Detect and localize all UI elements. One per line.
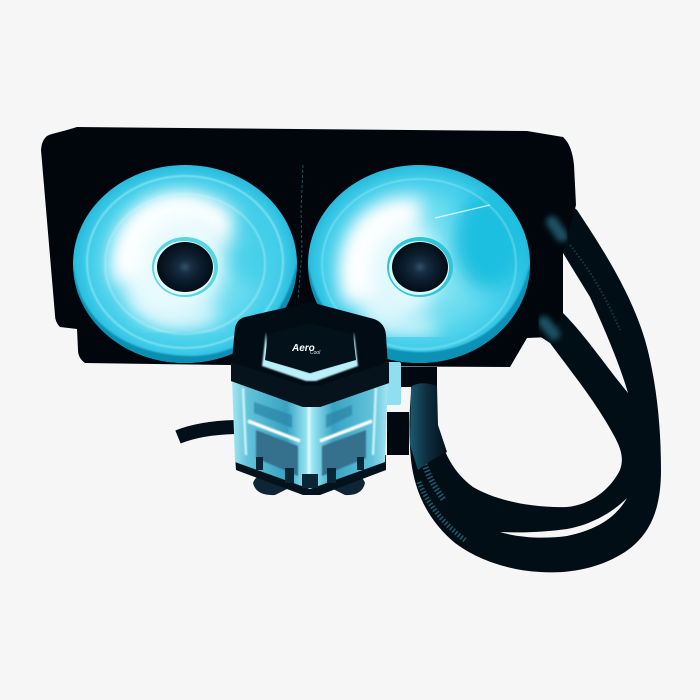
product illustration: RGB liquid cooler [41, 127, 661, 572]
hose braid highlights [419, 245, 620, 540]
pump feet [253, 475, 365, 495]
pump light bars [243, 388, 376, 482]
radiator body [41, 127, 576, 367]
pump base plate [235, 455, 386, 495]
pump [231, 302, 389, 495]
pump dark coolant [256, 430, 366, 476]
pump side fitting [386, 362, 401, 405]
pump cap lower band [231, 362, 389, 407]
pump glass right [310, 378, 388, 489]
hose connector block [387, 367, 447, 470]
hose collars on radiator [544, 222, 562, 334]
radiator centre seam [298, 165, 303, 300]
fan right [308, 165, 530, 380]
fan right bottom rim [308, 264, 530, 363]
fan left bottom rim [73, 264, 297, 363]
fan left [73, 165, 297, 380]
pump upper glass detail [254, 402, 352, 428]
hoses silhouette [409, 200, 661, 572]
logo: Cool [310, 350, 321, 356]
pump cap inner hexagon [265, 323, 356, 373]
pump hexagonal cap [231, 302, 389, 407]
pump cap light ring [262, 332, 358, 381]
fan right hub [392, 242, 448, 292]
cable [178, 427, 235, 437]
fan left hub [157, 242, 213, 292]
logo: Aero [291, 343, 315, 354]
pump notches [256, 457, 364, 488]
logo [291, 343, 321, 356]
pump glass left [232, 378, 310, 489]
